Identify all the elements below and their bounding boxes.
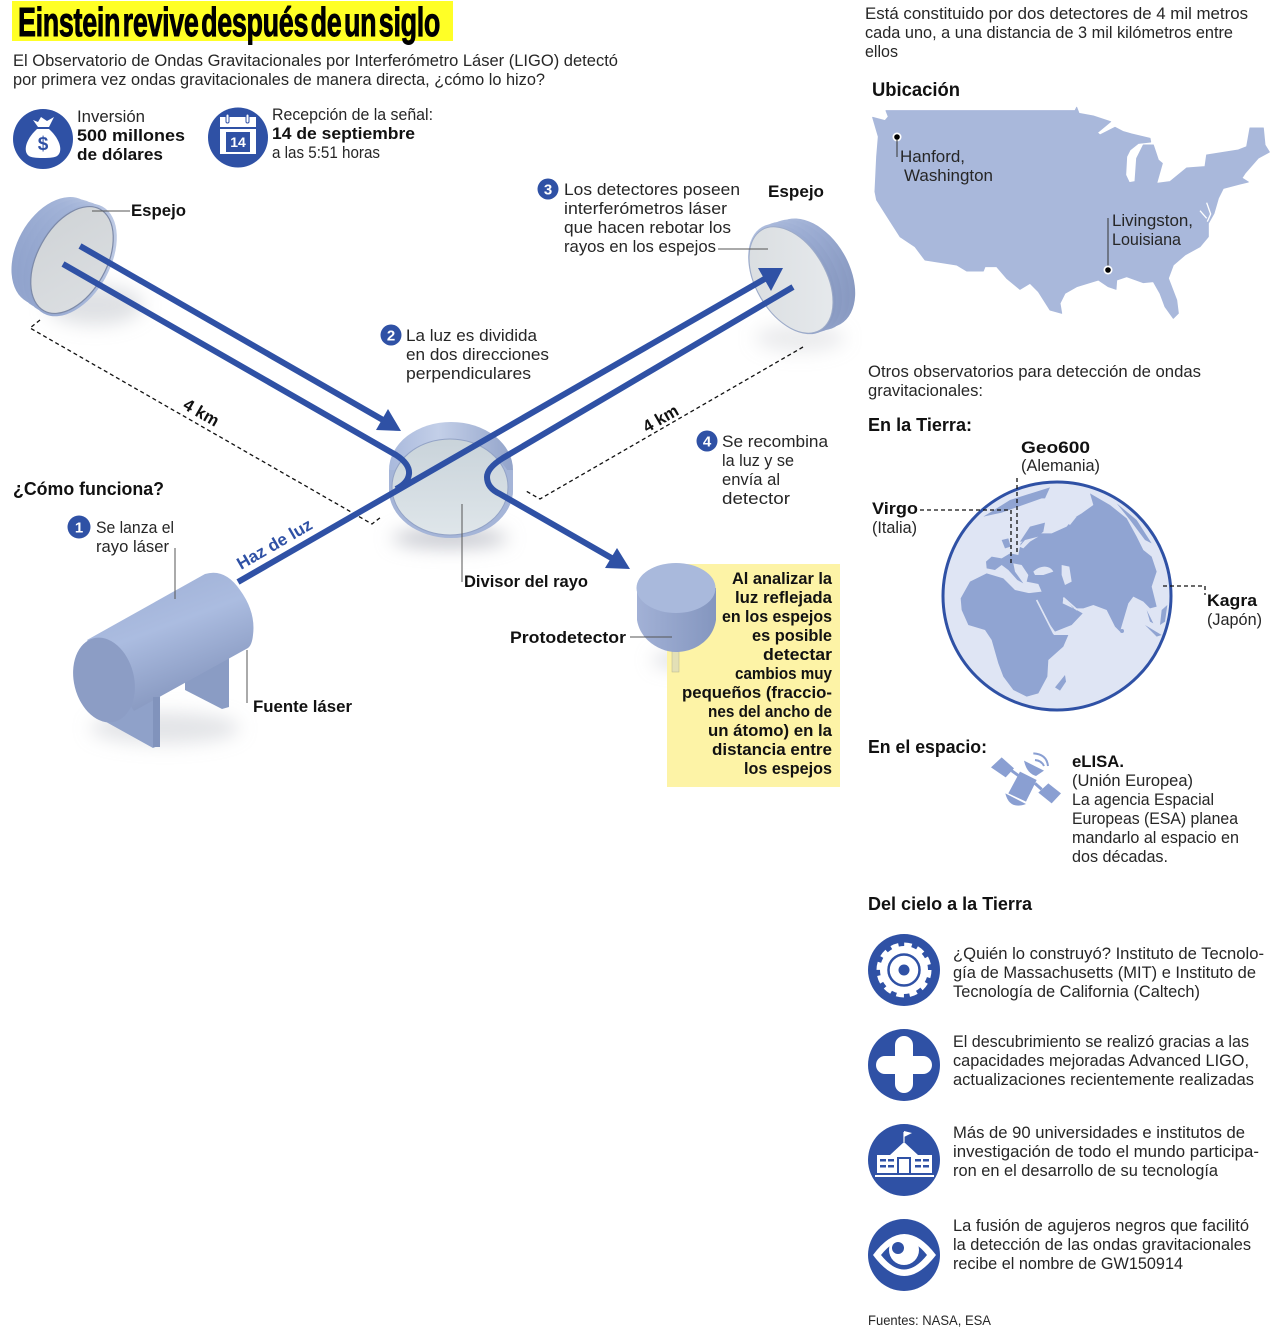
arrow: beam from left mirror to splitter (80, 246, 401, 431)
step 4: detector (722, 489, 790, 508)
step 4: Se recombina (722, 432, 829, 451)
arrow: laser beam to right mirror (238, 268, 783, 582)
callout text (682, 569, 833, 778)
step 3: Los detectores poseen (564, 180, 740, 199)
laser source (64, 573, 253, 748)
investment text: Inversión (77, 107, 145, 126)
icon: eye (868, 1219, 940, 1291)
investment text (77, 107, 185, 164)
step 1: rayo láser (96, 537, 169, 556)
step 3: 3 (544, 182, 552, 198)
callout: Geo600: (Alemania) (1021, 456, 1100, 475)
label: left mirror (92, 201, 186, 220)
text: universities: Más de 90 universidades e institutos de (953, 1123, 1245, 1142)
arrow: beam to detector (487, 287, 793, 569)
callout text: nes del ancho de (708, 702, 832, 721)
icon: calendar (208, 108, 268, 168)
step 2 (380, 324, 549, 383)
beam splitter (389, 422, 513, 538)
text: who built it: ¿Quién lo construyó? Instituto de Tecnolo- (953, 944, 1264, 963)
other observatories text: gravitacionales: (868, 381, 983, 400)
text: discovery (953, 1032, 1254, 1089)
text: universities: investigación de todo el mundo participa- (953, 1142, 1259, 1161)
intro text (13, 51, 618, 89)
eLISA text (1072, 752, 1239, 866)
other observatories text: Otros observatorios para detección de ondas (868, 362, 1201, 381)
map: United States (873, 107, 1269, 318)
dimension: right 4 km: 4 km (640, 401, 682, 436)
dimension: right 4 km (526, 347, 803, 499)
signal reception text: Recepción de la señal: (272, 105, 433, 124)
step 2: en dos direcciones (406, 345, 549, 364)
label: right mirror: Espejo (768, 182, 824, 201)
dimension: left 4 km: 4 km (180, 395, 222, 430)
other observatories text (868, 362, 1201, 400)
step 1: Se lanza el (96, 518, 174, 537)
globe (943, 482, 1171, 710)
marker: Livingston (1104, 211, 1193, 274)
sources: Fuentes: NASA, ESA (868, 1312, 992, 1328)
eLISA text: mandarlo al espacio en (1072, 828, 1239, 847)
label: beam of light: Haz de luz (234, 515, 316, 573)
intro text: por primera vez ondas gravitacionales de manera directa, ¿cómo lo hizo? (13, 70, 545, 89)
description of detectors: cada uno, a una distancia de 3 mil kilómetros entre (865, 23, 1233, 42)
step 2: 2 (387, 328, 395, 344)
dimension: left 4 km (30, 320, 381, 524)
callout text: pequeños (fraccio- (682, 683, 832, 702)
step 3: que hacen rebotar los (564, 218, 731, 237)
step 3: rayos en los espejos (564, 237, 716, 256)
investment text: 500 millones (77, 126, 185, 145)
step 2: perpendiculares (406, 364, 531, 383)
callout text: en los espejos (722, 607, 832, 626)
intro text: El Observatorio de Ondas Gravitacionales por Interferómetro Láser (LIGO) detectó (13, 51, 618, 70)
heading: on Earth: En la Tierra: (868, 415, 972, 435)
callout text: cambios muy (735, 664, 832, 683)
marker: Hanford (892, 132, 993, 185)
heading: how it works: ¿Cómo funciona? (13, 479, 164, 499)
photodetector (636, 563, 840, 787)
marker: Livingston: Louisiana (1112, 230, 1182, 249)
icon: money bag: $ (38, 134, 49, 155)
text: who built it: gía de Massachusetts (MIT) e Instituto de (953, 963, 1256, 982)
callout text: Al analizar la (732, 569, 833, 588)
callout: Geo600: Geo600 (1021, 438, 1090, 457)
step 3 (538, 178, 768, 256)
title (12, 0, 453, 45)
step 4 (696, 430, 829, 508)
label: laser source (247, 650, 352, 716)
right mirror (730, 203, 873, 349)
description of detectors (865, 4, 1248, 61)
eLISA text: (Unión Europea) (1072, 771, 1193, 790)
step 2: La luz es dividida (406, 326, 538, 345)
text: universities (953, 1123, 1259, 1180)
label: beam splitter: Divisor del rayo (464, 572, 588, 591)
step 3: interferómetros láser (564, 199, 727, 218)
title: Einstein revive después de un siglo (18, 0, 440, 45)
description of detectors: Está constituido por dos detectores de 4 mil metros (865, 4, 1248, 23)
shadows (47, 285, 845, 744)
callout: Geo600 (1017, 438, 1100, 552)
description of detectors: ellos (865, 42, 898, 61)
icon: gear (868, 934, 940, 1006)
left mirror (0, 182, 135, 331)
investment text: de dólares (77, 145, 163, 164)
callout: Virgo: (Italia) (872, 518, 917, 537)
text: universities: ron en el desarrollo de su tecnología (953, 1161, 1219, 1180)
heading: location: Ubicación (872, 80, 960, 101)
callout: Virgo (872, 499, 1011, 563)
icon: satellite (991, 753, 1061, 806)
callout text: los espejos (744, 759, 832, 778)
icon: plus (868, 1029, 940, 1101)
text: who built it (953, 944, 1264, 1001)
text: black holes (953, 1216, 1251, 1273)
icon: money bag (13, 109, 73, 169)
callout text: distancia entre (712, 740, 832, 759)
callout text: es posible (752, 626, 832, 645)
callout text: detectar (763, 645, 832, 664)
label: photodetector: Protodetector (510, 628, 626, 647)
label: laser source: Fuente láser (253, 697, 352, 716)
signal reception text: 14 de septiembre (272, 124, 415, 143)
marker: Livingston: Livingston, (1112, 211, 1193, 230)
step 1: 1 (75, 520, 83, 536)
callout: Kagra: Kagra (1207, 591, 1258, 610)
marker: Hanford: Hanford, (900, 147, 965, 166)
arrow: beam joining from left mirror (63, 264, 409, 489)
text: discovery: capacidades mejoradas Advanced LIGO, (953, 1051, 1249, 1070)
text: black holes: recibe el nombre de GW150914 (953, 1254, 1183, 1273)
text: black holes: La fusión de agujeros negros que facilitó (953, 1216, 1249, 1235)
marker: Hanford: Washington (904, 166, 993, 185)
callout: Virgo: Virgo (872, 499, 918, 518)
heading: from sky to Earth: Del cielo a la Tierra (868, 894, 1033, 914)
eLISA text: dos décadas. (1072, 847, 1168, 866)
callout: Kagra: (Japón) (1207, 610, 1262, 629)
heading: in space: En el espacio: (868, 737, 987, 757)
signal reception text (272, 105, 433, 162)
icon: school (868, 1124, 940, 1196)
step 1 (68, 516, 175, 599)
callout: Kagra (1163, 586, 1262, 629)
callout text: un átomo) en la (708, 721, 833, 740)
step 4: 4 (703, 434, 712, 450)
callout text: luz reflejada (735, 588, 833, 607)
text: black holes: la detección de las ondas gravitacionales (953, 1235, 1251, 1254)
text: who built it: Tecnología de California (Caltech) (953, 982, 1200, 1001)
label: left mirror: Espejo (131, 201, 186, 220)
step 4: envía al (722, 470, 780, 489)
label: beam splitter (462, 504, 588, 591)
eLISA text: eLISA. (1072, 752, 1124, 771)
signal reception text: a las 5:51 horas (272, 143, 380, 162)
eLISA text: La agencia Espacial (1072, 790, 1214, 809)
step 4: la luz y se (722, 451, 794, 470)
icon: calendar: 14 (230, 134, 246, 150)
text: discovery: El descubrimiento se realizó gracias a las (953, 1032, 1249, 1051)
eLISA text: Europeas (ESA) planea (1072, 809, 1239, 828)
text: discovery: actualizaciones recientemente realizadas (953, 1070, 1254, 1089)
